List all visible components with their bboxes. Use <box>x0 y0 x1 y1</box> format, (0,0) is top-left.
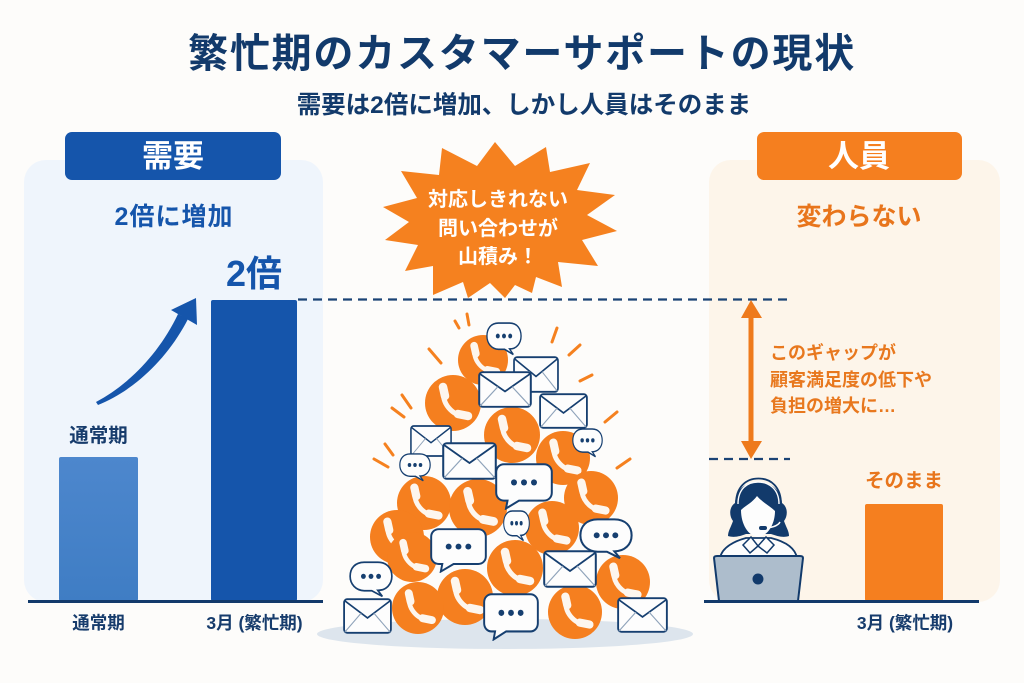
staff header tab: 人員 <box>828 139 890 174</box>
icon: pile of inquiries <box>317 314 693 649</box>
callout: burst: 対応しきれない <box>428 188 568 211</box>
demand header tab <box>65 132 281 180</box>
callout: burst <box>383 142 617 298</box>
subtitle: 需要は2倍に増加、しかし人員はそのまま <box>297 91 751 119</box>
label: normal period axis: 通常期 <box>72 613 125 633</box>
bar: staff March <box>865 504 943 601</box>
demand heading: 2倍に増加 <box>115 203 233 231</box>
title: 繁忙期のカスタマーサポートの現状 <box>188 32 856 76</box>
label: March busy period staff axis: 3月 (繁忙期) <box>857 613 953 633</box>
staff baseline <box>704 600 979 603</box>
envelopes and chat bubbles <box>344 323 667 639</box>
panel: demand <box>24 132 323 633</box>
staff heading: 変わらない <box>796 203 922 231</box>
gap note: このギャップが <box>770 342 896 363</box>
bar label: 2x: 2倍 <box>226 253 282 294</box>
pile shadow <box>317 619 693 649</box>
label: unchanged: そのまま <box>865 470 943 492</box>
bar: March busy period <box>211 300 297 601</box>
demand header tab: 需要 <box>142 139 204 174</box>
icon: support operator with laptop <box>714 478 803 601</box>
arrow: gap <box>741 300 762 459</box>
demand baseline <box>28 600 323 603</box>
arrow: growth <box>96 298 197 405</box>
gap note <box>770 342 932 416</box>
gap reference dashed lines <box>298 300 790 459</box>
label: normal period above bar: 通常期 <box>69 425 128 447</box>
panel: staff <box>704 132 1000 633</box>
staff panel background <box>709 160 1000 602</box>
demand panel background <box>24 160 323 602</box>
gap note: 負担の増大に… <box>770 395 896 416</box>
staff header tab <box>757 132 962 180</box>
bar: normal period <box>59 457 138 601</box>
phones <box>370 335 650 639</box>
gap note: 顧客満足度の低下や <box>770 370 932 390</box>
label: March busy period axis: 3月 (繁忙期) <box>206 613 303 633</box>
spark lines <box>374 314 630 468</box>
callout: burst: 山積み！ <box>458 245 538 268</box>
callout: burst: 問い合わせが <box>438 216 558 240</box>
